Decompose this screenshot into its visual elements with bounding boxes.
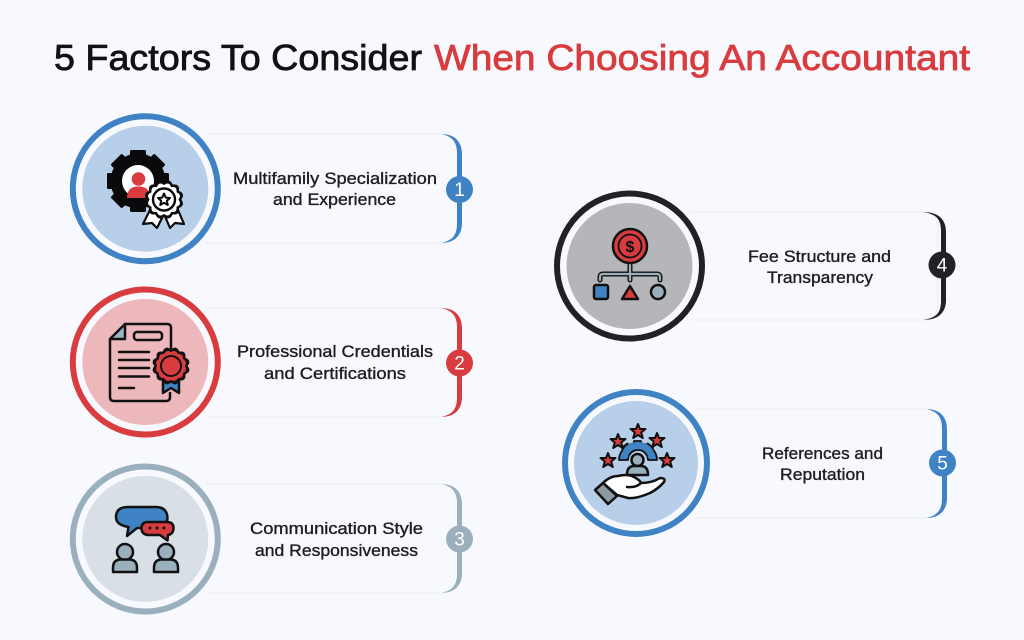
title: 5 Factors To Consider <box>54 37 422 78</box>
label: Fee Structure and <box>748 248 891 266</box>
panel: factor 1 <box>73 116 473 261</box>
bracket <box>441 308 462 417</box>
label <box>233 170 437 209</box>
number badge: 1 <box>454 180 465 201</box>
circle <box>73 466 218 612</box>
label: References and <box>762 445 883 463</box>
card outline <box>695 409 926 518</box>
icon: gear with person and medal <box>107 150 184 228</box>
number badge: 2 <box>454 354 465 374</box>
icon: hand holding person and stars <box>595 424 674 504</box>
bracket <box>441 484 462 593</box>
circle <box>73 116 218 261</box>
bracket <box>923 212 946 320</box>
label <box>748 248 891 287</box>
icon: two people talking <box>113 507 178 572</box>
label: and Responsiveness <box>255 542 418 560</box>
card outline <box>205 484 441 593</box>
bracket <box>926 409 947 518</box>
icon: certificate <box>110 324 191 401</box>
card outline <box>205 308 441 417</box>
title <box>54 37 970 78</box>
icon: fee structure tree: $ <box>626 239 635 256</box>
icon: fee structure tree <box>594 229 665 299</box>
panel: factor 4 <box>557 194 956 338</box>
number badge <box>446 526 473 552</box>
number badge <box>928 252 956 278</box>
label <box>237 343 433 383</box>
number badge: 4 <box>937 256 948 276</box>
label: Multifamily Specialization <box>233 170 437 188</box>
label: and Certifications <box>264 365 406 383</box>
panel: factor 2 <box>73 290 473 434</box>
label: Professional Credentials <box>237 343 433 361</box>
bracket <box>441 134 462 243</box>
card outline <box>205 134 441 243</box>
circle <box>557 194 702 338</box>
label: Transparency <box>767 269 874 287</box>
label <box>250 520 423 560</box>
panel: factor 5 <box>565 392 956 534</box>
label: and Experience <box>273 191 396 209</box>
label: Communication Style <box>250 520 423 538</box>
circle <box>73 290 218 434</box>
number badge <box>929 450 956 476</box>
label: Reputation <box>780 466 865 484</box>
panel: factor 3 <box>73 466 473 612</box>
label <box>762 445 883 484</box>
circle <box>565 392 707 534</box>
number badge: 5 <box>937 454 948 474</box>
number badge <box>446 350 473 376</box>
title: When Choosing An Accountant <box>434 37 970 78</box>
number badge: 3 <box>454 530 465 550</box>
number badge <box>446 176 473 203</box>
card outline <box>690 212 938 320</box>
